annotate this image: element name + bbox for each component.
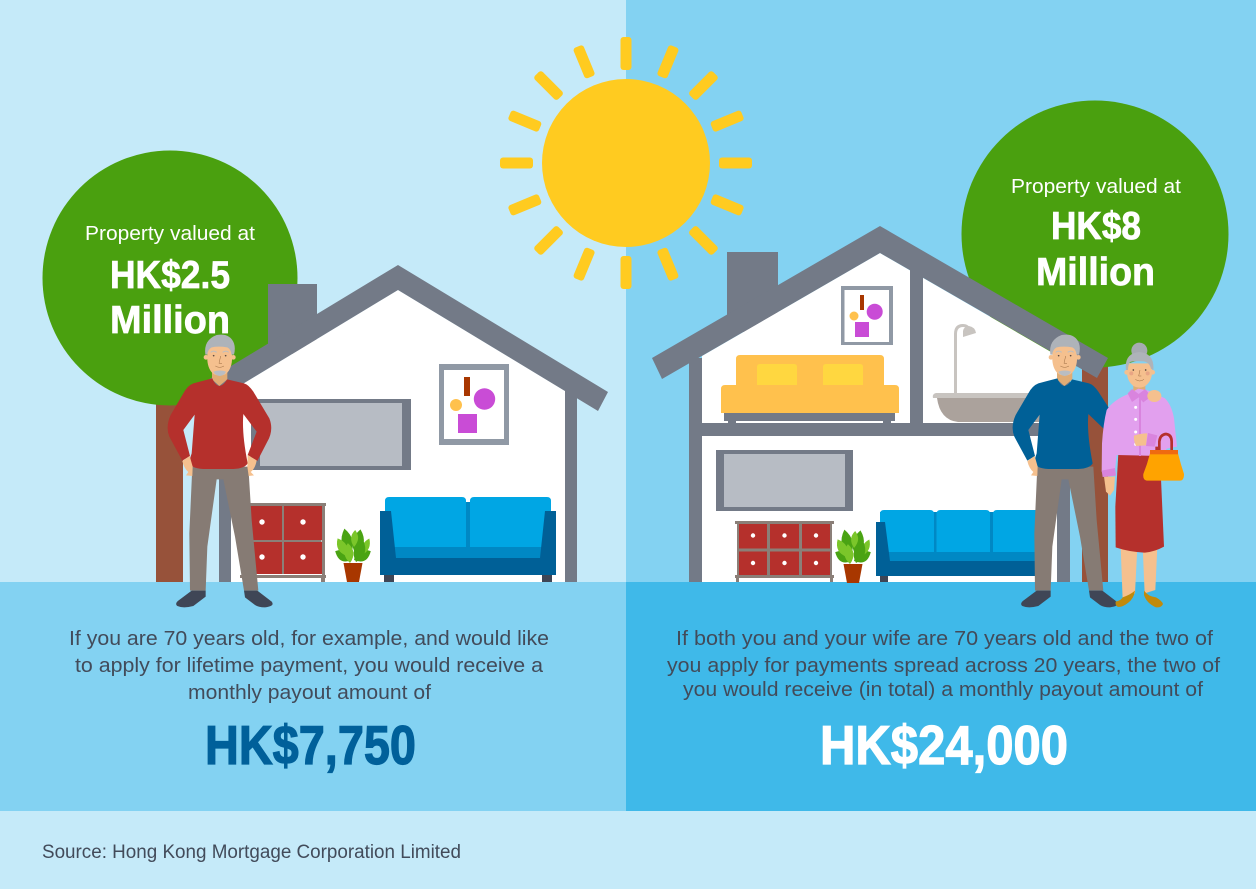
collar — [1128, 389, 1149, 402]
house walls — [702, 253, 1058, 582]
bed — [721, 355, 899, 423]
chimney — [268, 284, 317, 354]
figure: woman in pink blouse with handbag — [1102, 343, 1184, 607]
trousers — [1034, 467, 1103, 591]
sweater — [1013, 378, 1122, 469]
man's hand on shoulder — [1147, 390, 1161, 402]
text block: right scenario — [667, 628, 1220, 701]
amount: left monthly payout: HK$7,750 — [205, 714, 416, 776]
house walls — [231, 290, 565, 582]
amount: right monthly payout: HK$24,000 — [820, 714, 1068, 776]
text block: right scenario: you apply for payments spread across 20 years, the two of — [667, 655, 1220, 677]
callout: right property value: Property valued at — [1011, 176, 1181, 198]
head — [1049, 335, 1081, 376]
blouse placket — [1139, 398, 1141, 456]
source note: Source: Hong Kong Mortgage Corporation Limited — [42, 842, 461, 863]
callout: right property value: Million — [1036, 251, 1155, 294]
legs — [1121, 547, 1137, 600]
icon: sun — [500, 37, 752, 289]
bathtub and shower — [933, 326, 1040, 422]
hand — [1027, 456, 1038, 476]
hands — [182, 456, 193, 476]
wall picture — [841, 286, 893, 345]
callout: right property value: HK$8 — [1051, 205, 1141, 248]
background: left text band — [0, 582, 626, 811]
text block: left scenario: monthly payout amount of — [188, 682, 431, 704]
callout: left property value: Property valued at — [85, 223, 255, 245]
neck — [212, 370, 227, 386]
trousers — [189, 467, 258, 591]
window — [251, 399, 411, 470]
panel: left house — [188, 265, 608, 582]
head — [204, 335, 236, 376]
skirt — [1115, 453, 1164, 553]
head — [1124, 352, 1155, 388]
panel: right tree with property value — [962, 100, 1228, 582]
sweater — [168, 378, 271, 469]
forearm hand and sleeve — [1134, 433, 1147, 446]
callout: right property value — [1011, 176, 1181, 294]
callout: left property value: Million — [110, 299, 230, 342]
text block: left scenario: to apply for lifetime payment, you would receive a — [75, 655, 544, 677]
window — [716, 450, 853, 511]
background: left panel — [0, 0, 626, 582]
hair bun — [1131, 343, 1147, 359]
blouse — [1102, 389, 1177, 472]
cuff and lower hand — [1104, 477, 1115, 496]
roof — [188, 265, 608, 411]
neck — [1133, 380, 1145, 393]
text block: right scenario: If both you and your wife are 70 years old and the two of — [676, 628, 1213, 650]
wall picture — [439, 364, 509, 445]
text block: left scenario: If you are 70 years old, for example, and would like — [69, 628, 549, 650]
shoes — [1116, 591, 1135, 607]
shoes — [176, 591, 206, 607]
callout: left property value: HK$2.5 — [110, 254, 230, 297]
panel: right house — [652, 226, 1108, 583]
sofa — [380, 497, 556, 582]
figure: man in red sweater — [168, 335, 273, 607]
panel: left tree with property value — [42, 150, 298, 582]
background: right text band — [626, 582, 1256, 811]
icon: plant — [833, 528, 873, 583]
callout: left property value — [85, 223, 255, 342]
buttons — [1134, 406, 1137, 446]
figure: man in blue sweater — [1013, 335, 1122, 607]
drawers — [735, 521, 834, 582]
drawers — [240, 503, 326, 582]
background: footer band — [0, 811, 1256, 889]
roof — [652, 226, 1108, 379]
text block: right scenario: you would receive (in total) a monthly payout amount of — [683, 679, 1203, 701]
text block: left scenario — [69, 628, 549, 704]
background: right panel — [626, 0, 1256, 582]
icon: plant — [333, 527, 373, 582]
chimney — [727, 252, 778, 332]
sofa — [876, 510, 1051, 582]
shoes — [1021, 591, 1051, 607]
icon: handbag — [1143, 434, 1184, 481]
neck — [1057, 370, 1072, 386]
